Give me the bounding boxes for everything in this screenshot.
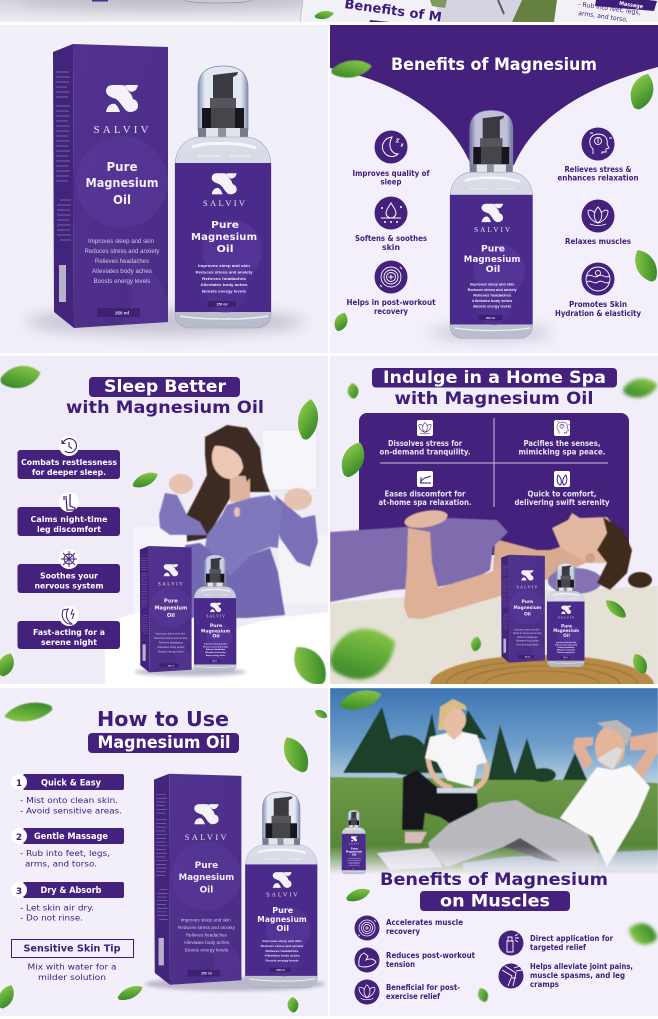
man trousers (428, 800, 600, 870)
purple header swoosh (330, 25, 658, 165)
heading: Benefits of Magnesium (391, 55, 597, 74)
heading line 2: with Magnesium Oil (394, 389, 594, 409)
benefit: joint pains (498, 962, 633, 989)
cell: pacifies the senses: Pacifies the senses, (524, 439, 601, 448)
panel: indulge in a home spa (330, 356, 658, 684)
benefit: joint pains: cramps (530, 980, 559, 989)
cell: eases discomfort: Eases discomfort for (384, 490, 466, 498)
benefit: skin hydration: Promotes Skin (569, 300, 627, 309)
step 2: 2 (16, 833, 22, 843)
towel (330, 518, 508, 602)
leaves (0, 699, 329, 1013)
step 3: - Let skin air dry. (20, 902, 94, 912)
arm (404, 528, 537, 619)
benefit: post-exercise relief: exercise relief (386, 992, 441, 1001)
benefit: relieves stress: Relieves stress & (564, 165, 632, 174)
benefit: accelerates recovery: recovery (386, 927, 420, 936)
benefit: post-exercise relief: Beneficial for post- (386, 983, 460, 992)
cell: quick to comfort: Quick to comfort, (528, 490, 597, 498)
sensitive skin tip: milder solution (38, 972, 106, 982)
heading: Benefits of Magnesium (380, 870, 608, 890)
benefit: post-workout recovery: Helps in post-workout (346, 298, 436, 307)
benefit: improves quality of sleep: sleep (380, 178, 402, 186)
benefit: softens and soothes skin: Softens & soothes (355, 234, 427, 243)
sensitive skin tip: Mix with water for a (28, 962, 116, 972)
photo: woman on massage table (330, 507, 658, 684)
benefit card: combats restlessness (18, 436, 120, 479)
product: bottle (547, 563, 584, 667)
rolled towel (548, 568, 602, 594)
man arms (573, 737, 593, 770)
cell: dissolves stress (380, 420, 471, 456)
man shoes (377, 848, 443, 870)
benefit: softens and soothes skin (355, 196, 427, 252)
step 2: arms, and torso. (25, 858, 97, 868)
cell: eases discomfort (378, 471, 472, 507)
heading pill (420, 891, 570, 912)
benefit: reduces tension: tension (386, 960, 415, 969)
step 1 (11, 774, 124, 816)
product shadow (25, 309, 305, 335)
benefit: relaxes muscles: Relaxes muscles (565, 237, 631, 246)
benefit card: combats restlessness: for deeper sleep. (32, 468, 106, 477)
step 2: Gentle Massage (34, 832, 108, 842)
leaves (0, 362, 333, 691)
panel: how to use (0, 688, 329, 1016)
bun (628, 572, 652, 588)
pajama trousers (185, 543, 285, 618)
face (552, 513, 617, 563)
photo: couple exercising in park (330, 688, 658, 880)
cell: dissolves stress: Dissolves stress for (388, 439, 462, 448)
cell: quick to comfort: delivering swift serenity (514, 498, 610, 507)
top strip: cropped slide previews (0, 0, 658, 22)
product: box (501, 555, 545, 663)
chest (493, 539, 593, 580)
product: bottle (450, 110, 533, 338)
panel: sleep better (0, 356, 333, 691)
benefit card: nervous system (18, 549, 120, 593)
photo: woman stretching on bed (105, 425, 328, 684)
benefit card: leg discomfort: leg discomfort (37, 525, 101, 534)
benefit: reduces tension (354, 948, 475, 972)
benefit: joint pains: muscle spasms, and leg (530, 971, 625, 980)
man shirt (560, 765, 650, 867)
benefit: skin hydration (555, 262, 642, 318)
benefit card: nervous system: nervous system (34, 582, 104, 590)
heading pill: Sleep Better (104, 377, 227, 397)
benefit: post-exercise relief (354, 980, 460, 1004)
heading pill: Magnesium Oil (98, 733, 230, 752)
step 1: Quick & Easy (41, 778, 101, 788)
benefit: softens and soothes skin: skin (382, 243, 400, 252)
product: box (154, 774, 241, 985)
benefit: accelerates recovery (354, 916, 463, 940)
bottle shadow (429, 327, 553, 339)
benefit card: fast acting (18, 606, 120, 649)
table (330, 586, 658, 684)
leaves (323, 376, 658, 688)
product: bottle (342, 810, 366, 874)
woman arms (428, 758, 487, 790)
cell: pacifies the senses (518, 420, 606, 456)
face (211, 444, 244, 480)
benefit: skin hydration: Hydration & elasticity (555, 309, 642, 318)
product shadow (145, 977, 325, 991)
benefit: reduces tension: Reduces post-workout (386, 951, 475, 960)
product: box (53, 44, 168, 328)
woven stool (430, 655, 654, 715)
heading: How to Use (97, 707, 229, 731)
product: bottle (194, 555, 236, 672)
product: bottle (245, 792, 317, 988)
heading pill: Indulge in a Home Spa (383, 368, 606, 388)
benefit: improves quality of sleep: Improves quality of (352, 169, 430, 178)
heading pill: on Muscles (440, 892, 550, 912)
product shadow (134, 668, 246, 676)
leaves (330, 58, 658, 333)
hands (403, 507, 449, 531)
hair (185, 425, 270, 542)
cell: eases discomfort: at-home spa relaxation. (378, 498, 472, 507)
woman shirt (425, 732, 487, 787)
cell: dissolves stress: on-demand tranquility. (380, 448, 471, 456)
benefit: relieves stress: enhances relaxation (558, 174, 639, 182)
benefit card: fast acting: serene night (41, 638, 97, 647)
pajama sleeve right (275, 495, 318, 567)
step 1: 1 (16, 779, 22, 789)
product: bottle (175, 66, 271, 328)
heading line 2: with Magnesium Oil (66, 398, 264, 418)
hair (597, 517, 632, 590)
step 3 (11, 882, 124, 922)
benefits panel (359, 413, 629, 555)
benefit card: fast acting: Fast-acting for a (33, 628, 105, 637)
benefit: relaxes muscles (565, 200, 631, 246)
benefit card: leg discomfort: Calms night-time (30, 515, 108, 524)
product: box (140, 546, 192, 672)
pajama sleeve left (159, 493, 207, 535)
benefit: direct application: targeted relief (530, 943, 587, 952)
man head (595, 726, 625, 768)
panel: benefits on muscles (330, 686, 658, 1016)
panel: benefits of magnesium (330, 25, 658, 353)
top strip: cropped slide previews: arms, and torso. (578, 9, 628, 24)
benefit: post-workout recovery: recovery (374, 307, 409, 316)
cell: pacifies the senses: mimicking spa peace. (518, 448, 606, 456)
step 3: 3 (16, 887, 22, 897)
step 2: - Rub into feet, legs, (20, 848, 110, 858)
trees (343, 707, 587, 782)
top strip: cropped slide previews: - Rub into feet, legs, (578, 0, 641, 17)
leaves (338, 686, 658, 1003)
benefit card: leg discomfort (18, 492, 120, 536)
mat (463, 850, 658, 870)
step 1: - Mist onto clean skin. (20, 795, 118, 805)
benefit: post-workout recovery (346, 260, 436, 316)
benefit card: nervous system: Soothes your (40, 572, 98, 580)
sensitive skin tip: Sensitive Skin Tip (24, 944, 121, 954)
woman trousers (402, 770, 478, 830)
benefit: joint pains: Helps alleviate joint pains, (530, 962, 633, 971)
benefit: direct application (498, 930, 613, 956)
benefit: accelerates recovery: Accelerates muscle (386, 918, 463, 927)
step 1: - Avoid sensitive areas. (20, 806, 122, 816)
top strip: cropped slide previews: Massage (619, 1, 644, 10)
benefit: direct application: Direct application for (530, 934, 613, 943)
cell: quick to comfort (514, 471, 610, 507)
benefit card: combats restlessness: Combats restlessness (21, 458, 117, 467)
panel: product box and bottle (0, 25, 328, 353)
step 2 (11, 828, 124, 868)
sensitive skin tip (12, 940, 134, 982)
benefit: improves quality of sleep (352, 130, 430, 186)
step 3: - Do not rinse. (20, 912, 83, 922)
woman head (440, 707, 466, 733)
pajama torso (205, 495, 282, 575)
step 3: Dry & Absorb (40, 886, 102, 896)
neck (230, 476, 250, 502)
benefit: relieves stress (558, 128, 639, 182)
